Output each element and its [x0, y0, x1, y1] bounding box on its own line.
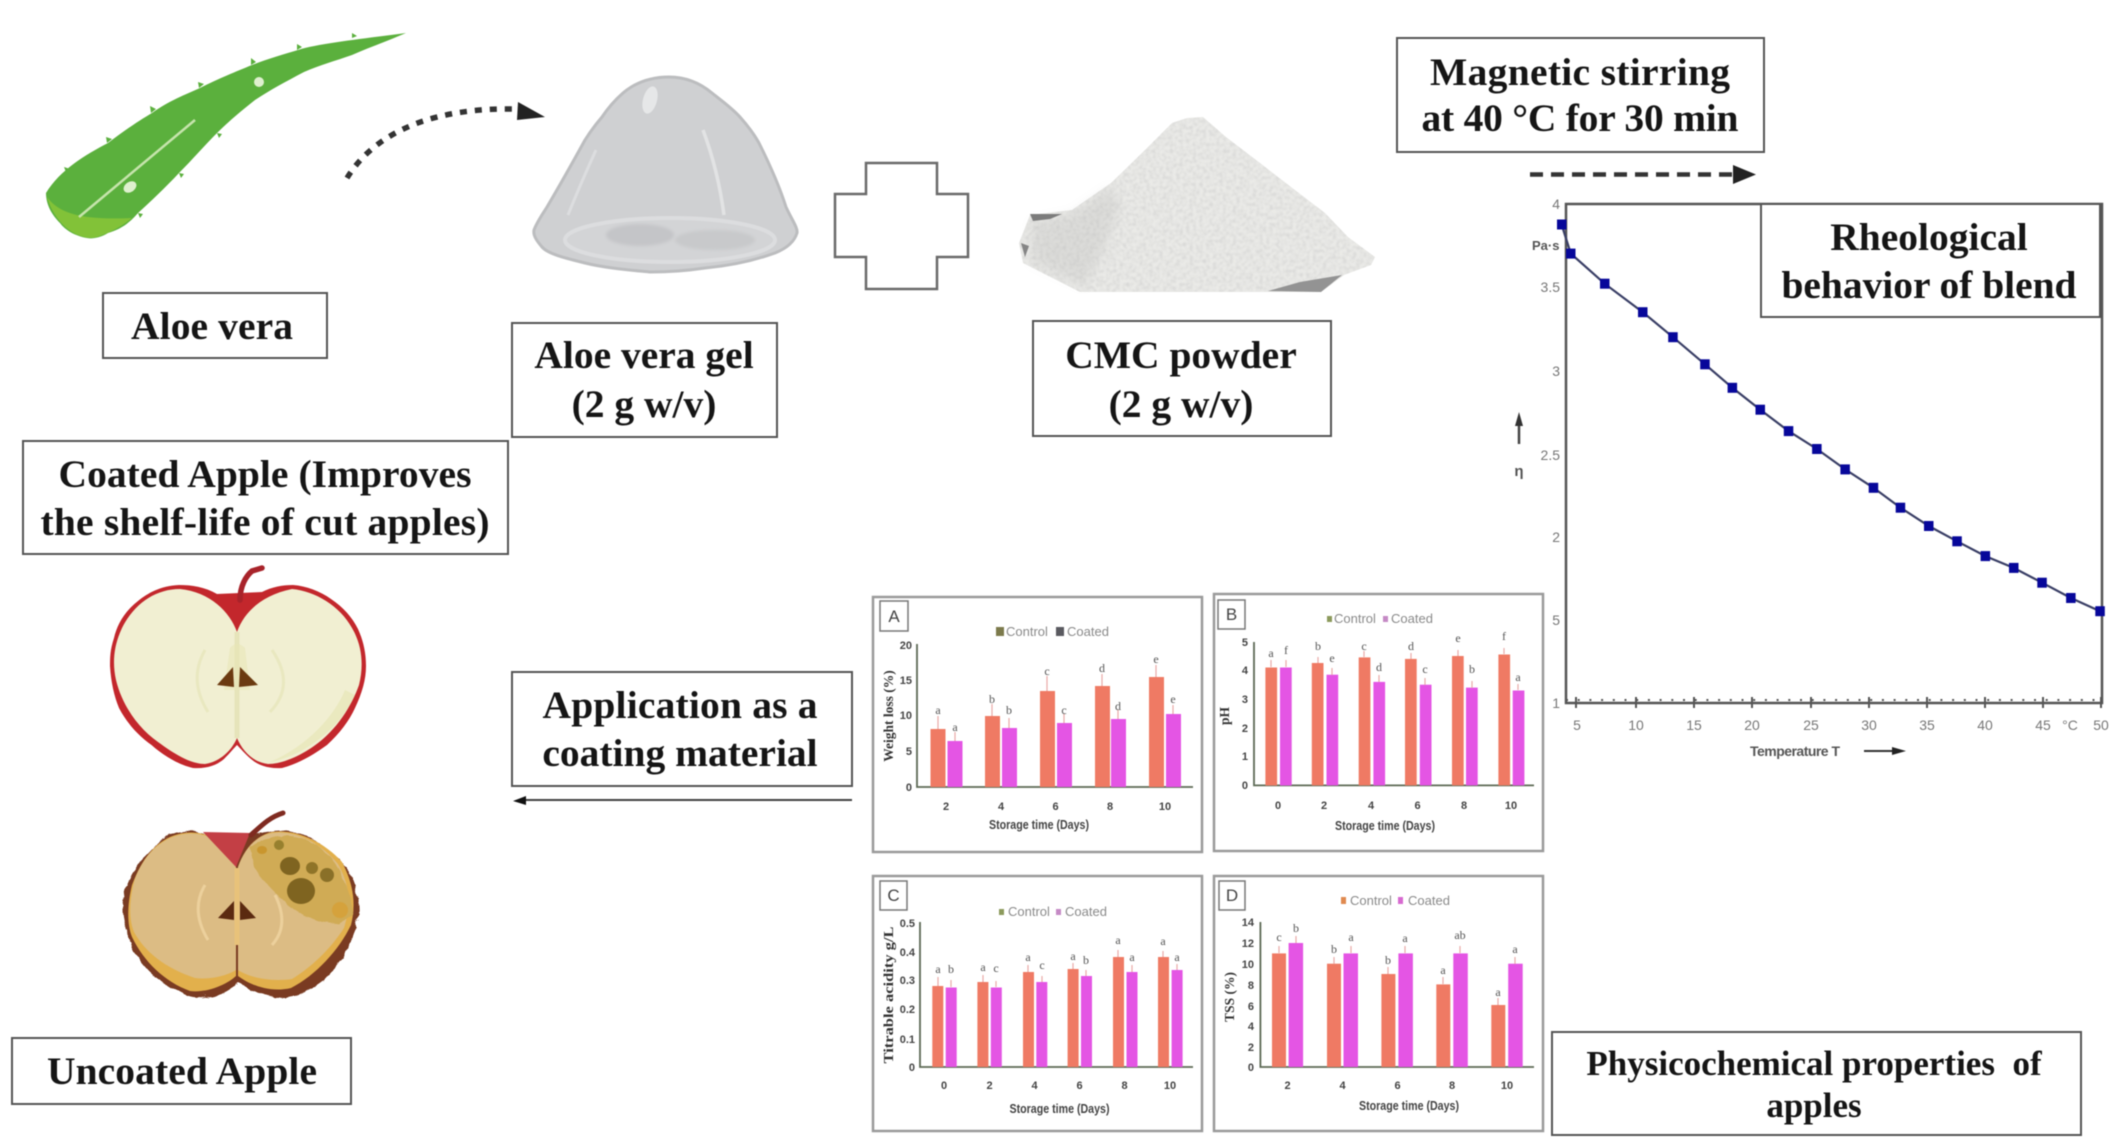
label: Application as a coating material: Application as a: [542, 683, 818, 727]
y axis tick labels: 2.5: [1541, 447, 1560, 463]
significance letters: [935, 933, 1180, 976]
legend: Control: [1006, 624, 1048, 639]
y tick labels: 1: [1242, 751, 1248, 763]
axes: [917, 644, 1193, 787]
panel tag C: [880, 881, 907, 910]
label: Physicochemical properties of apples: Physicochemical properties of: [1586, 1044, 2042, 1083]
x axis tick labels: 20: [1744, 717, 1760, 733]
x axis tick labels: [1573, 717, 2109, 733]
x axis tick labels: 5: [1573, 717, 1581, 733]
y unit: Pa·s: [1532, 238, 1559, 253]
y tick labels: 20: [900, 640, 912, 652]
y tick labels: 0.3: [900, 975, 915, 987]
significance letters: b: [1331, 942, 1337, 956]
significance letters: a: [935, 962, 941, 976]
significance letters: a: [1129, 950, 1135, 964]
data curve: [1562, 224, 2100, 611]
label: Rheological behavior of blend: Rheological: [1830, 215, 2028, 259]
significance letters: b: [1385, 953, 1391, 967]
axes: [1254, 642, 1534, 785]
significance letters: f: [1284, 643, 1288, 657]
significance letters: c: [1061, 703, 1067, 717]
panel tag D: [1219, 881, 1245, 910]
label: Coated apple: Coated Apple (Improves: [58, 452, 472, 496]
legend: [1327, 611, 1433, 626]
icon: fresh coated apple half: [110, 568, 366, 768]
y tick labels: 0: [1242, 780, 1248, 792]
x tick labels: 8: [1107, 801, 1113, 813]
label: Magnetic stirring: [1397, 38, 1764, 152]
significance letters: a: [1174, 950, 1180, 964]
x tick labels: [1284, 1080, 1513, 1092]
y tick labels: 2: [1248, 1042, 1254, 1054]
y tick labels: 0.1: [900, 1034, 915, 1046]
y axis title: pH: [1217, 706, 1232, 725]
significance letters: d: [1376, 660, 1382, 674]
x axis ticks: [1566, 697, 2102, 708]
panel tag A: [880, 601, 908, 631]
label: CMC powder: (2 g w/v): [1109, 382, 1253, 426]
y tick labels: 14: [1242, 917, 1255, 929]
legend: [996, 624, 1109, 639]
x axis tick labels: 10: [1628, 717, 1644, 733]
significance letters: d: [1408, 639, 1414, 653]
label: Aloe vera: [103, 293, 327, 358]
panel B: pH chart: [1214, 594, 1543, 851]
bars: [1265, 648, 1524, 786]
y tick labels: 2: [1242, 723, 1248, 735]
y tick labels: [900, 640, 912, 794]
arrow: dashed arrow to rheology chart: [1530, 165, 1756, 184]
significance letters: b: [1469, 662, 1475, 676]
significance letters: b: [1083, 953, 1089, 967]
x tick labels: 4: [998, 801, 1005, 813]
significance letters: a: [1495, 985, 1501, 999]
x tick labels: 10: [1505, 800, 1517, 812]
y axis tick labels: [1541, 196, 1560, 711]
x axis tick labels: 25: [1803, 717, 1819, 733]
y tick labels: 0.2: [900, 1004, 915, 1016]
significance letters: f: [1502, 629, 1506, 643]
panel C: titrable acidity chart: [873, 876, 1202, 1131]
y tick labels: 5: [906, 746, 912, 758]
y axis title: Weight loss (%): [881, 670, 896, 762]
x axis tick labels: °C: [2062, 717, 2078, 733]
y tick labels: [1242, 637, 1249, 792]
significance letters: ab: [1454, 928, 1466, 942]
significance letters: [1276, 921, 1518, 999]
significance letters: b: [1315, 639, 1321, 653]
icon: aloe vera gel dome: [534, 77, 797, 272]
significance letters: e: [1329, 651, 1335, 665]
bars: [932, 950, 1183, 1067]
x axis title: Storage time (Days): [1335, 819, 1435, 833]
arrow: charts to apples: [513, 796, 852, 805]
x axis tick labels: 15: [1686, 717, 1702, 733]
x tick labels: 4: [1368, 800, 1375, 812]
x axis title: Storage time (Days): [1010, 1102, 1110, 1116]
significance letters: a: [952, 720, 958, 734]
y axis tick labels: 4: [1552, 196, 1560, 212]
legend: [999, 904, 1107, 919]
x tick labels: 8: [1461, 800, 1467, 812]
significance letters: a: [1402, 931, 1408, 945]
y tick labels: 6: [1248, 1001, 1254, 1013]
icon: aloe vera leaf: [46, 33, 406, 238]
x axis arrow: [1864, 747, 1906, 755]
y axis tick labels: 3: [1552, 363, 1560, 379]
x tick labels: [943, 801, 1171, 813]
legend: Control: [1350, 893, 1392, 908]
significance letters: c: [1276, 930, 1282, 944]
significance letters: [935, 652, 1176, 734]
plot frame: [1566, 204, 2102, 703]
x tick labels: 8: [1449, 1080, 1455, 1092]
x axis tick labels: 50: [2093, 717, 2109, 733]
x tick labels: 8: [1121, 1080, 1128, 1092]
x tick labels: 4: [1031, 1080, 1038, 1092]
y axis title: TSS (%): [1222, 972, 1237, 1022]
significance letters: e: [1170, 692, 1176, 706]
label: Aloe vera gel: (2 g w/v): [572, 382, 716, 426]
x axis tick labels: 30: [1861, 717, 1877, 733]
label: Aloe vera gel: [512, 323, 777, 437]
y axis symbol and arrow: [1514, 412, 1524, 480]
y tick labels: 0.5: [900, 918, 915, 930]
y tick labels: 8: [1248, 980, 1254, 992]
x tick labels: 10: [1501, 1080, 1513, 1092]
significance letters: c: [1044, 664, 1050, 678]
y tick labels: 12: [1242, 938, 1254, 950]
x tick labels: [941, 1080, 1176, 1092]
significance letters: a: [1115, 933, 1121, 947]
label: Application as a coating material: [512, 672, 852, 786]
legend: Coated: [1391, 611, 1433, 626]
y tick labels: 4: [1242, 665, 1249, 677]
significance letters: a: [1440, 963, 1446, 977]
label: Physicochemical properties of apples: [1552, 1032, 2081, 1135]
significance letters: a: [1160, 934, 1166, 948]
y axis title: Titrable acidity g/L: [881, 926, 896, 1064]
axes: [1260, 922, 1534, 1067]
y axis tick labels: 2: [1552, 529, 1560, 545]
significance letters: b: [989, 692, 995, 706]
panel A: weight loss chart: [873, 597, 1202, 852]
y tick labels: 0: [906, 782, 912, 794]
label: Aloe vera: Aloe vera: [131, 304, 293, 348]
x tick labels: [1275, 800, 1517, 812]
x axis tick labels: 35: [1919, 717, 1935, 733]
panel tag A: A: [888, 607, 900, 626]
x axis tick labels: 45: [2035, 717, 2051, 733]
significance letters: c: [1422, 662, 1428, 676]
legend: [1341, 893, 1450, 908]
y tick labels: 5: [1242, 637, 1248, 649]
legend: Control: [1008, 904, 1050, 919]
significance letters: a: [1268, 646, 1274, 660]
label: Aloe vera gel: Aloe vera gel: [534, 333, 754, 377]
x tick labels: 0: [941, 1080, 947, 1092]
significance letters: a: [1025, 950, 1031, 964]
significance letters: b: [948, 962, 954, 976]
legend: Coated: [1408, 893, 1450, 908]
significance letters: c: [993, 961, 999, 975]
icon: plus sign: [835, 163, 968, 289]
significance letters: a: [1348, 930, 1354, 944]
panel tag D: D: [1226, 886, 1238, 905]
label: Uncoated apple: [12, 1038, 351, 1104]
y axis tick labels: 5: [1552, 612, 1560, 628]
significance letters: a: [1515, 670, 1521, 684]
bars: [930, 665, 1181, 787]
significance letters: c: [1361, 639, 1367, 653]
x tick labels: 2: [986, 1080, 993, 1092]
significance letters: d: [1099, 661, 1105, 675]
x tick labels: 2: [1321, 800, 1327, 812]
x tick labels: 4: [1339, 1080, 1346, 1092]
x tick labels: 10: [1164, 1080, 1176, 1092]
label: Rheological behavior of blend: behavior of blend: [1782, 263, 2077, 307]
y axis symbol and arrow: η: [1514, 463, 1524, 480]
x axis tick labels: 40: [1977, 717, 1993, 733]
label: Magnetic stirring: Magnetic stirring: [1430, 50, 1730, 94]
legend: Control: [1334, 611, 1376, 626]
x tick labels: 0: [1275, 800, 1281, 812]
legend: Coated: [1067, 624, 1109, 639]
arrow: dotted curved arrow to gel: [347, 102, 545, 178]
significance letters: e: [1153, 652, 1159, 666]
x tick labels: 2: [943, 801, 949, 813]
x tick labels: 6: [1414, 800, 1421, 812]
significance letters: c: [1039, 958, 1045, 972]
significance letters: d: [1115, 699, 1121, 713]
label: Magnetic stirring: at 40 °C for 30 min: [1422, 96, 1739, 140]
label: Physicochemical properties of apples: apples: [1766, 1086, 1862, 1125]
y tick labels: 15: [900, 675, 912, 687]
icon: decayed uncoated apple half: [121, 813, 357, 996]
x tick labels: 6: [1076, 1080, 1083, 1092]
significance letters: a: [980, 960, 986, 974]
y tick labels: [900, 918, 916, 1074]
panel tag C: C: [887, 886, 900, 905]
x tick labels: 6: [1394, 1080, 1401, 1092]
bars: [1272, 936, 1523, 1067]
label: Coated apple: [23, 441, 508, 554]
significance letters: a: [1512, 942, 1518, 956]
significance letters: e: [1455, 631, 1461, 645]
x tick labels: 2: [1284, 1080, 1291, 1092]
significance letters: b: [1293, 921, 1299, 935]
significance letters: b: [1006, 703, 1012, 717]
icon: CMC powder pile: [1019, 117, 1375, 292]
y tick labels: 0.4: [900, 947, 916, 959]
x axis title: Temperature T: [1750, 743, 1840, 759]
y axis tick labels: 1: [1552, 695, 1560, 711]
y axis tick labels: 3.5: [1541, 279, 1560, 295]
y tick labels: [1242, 917, 1255, 1074]
panel tag B: [1218, 600, 1245, 629]
significance letters: [1268, 629, 1521, 684]
y tick labels: 4: [1248, 1021, 1255, 1033]
x axis title: Storage time (Days): [989, 818, 1089, 832]
label: Uncoated apple: Uncoated Apple: [47, 1049, 317, 1093]
label: Application as a coating material: coating material: [542, 731, 818, 775]
x tick labels: 6: [1052, 801, 1059, 813]
axes: [920, 922, 1193, 1067]
label: CMC powder: CMC powder: [1065, 333, 1297, 377]
label: Rheological behavior of blend: [1761, 204, 2100, 317]
significance letters: a: [935, 703, 941, 717]
label: CMC powder: [1033, 321, 1331, 436]
data markers: [1557, 220, 2105, 616]
legend: Coated: [1065, 904, 1107, 919]
y tick labels: 0: [909, 1062, 915, 1074]
y tick labels: 10: [1242, 959, 1254, 971]
x axis title: Storage time (Days): [1359, 1099, 1459, 1113]
panel D: TSS chart: [1214, 876, 1543, 1131]
significance letters: a: [1070, 949, 1076, 963]
y tick labels: 10: [900, 710, 912, 722]
chart: viscosity versus temperature: [1514, 196, 2109, 759]
y tick labels: 3: [1242, 694, 1248, 706]
x tick labels: 10: [1159, 801, 1171, 813]
label: Coated apple: the shelf-life of cut apples): [40, 500, 490, 544]
y tick labels: 0: [1248, 1062, 1254, 1074]
panel tag B: B: [1226, 605, 1237, 624]
